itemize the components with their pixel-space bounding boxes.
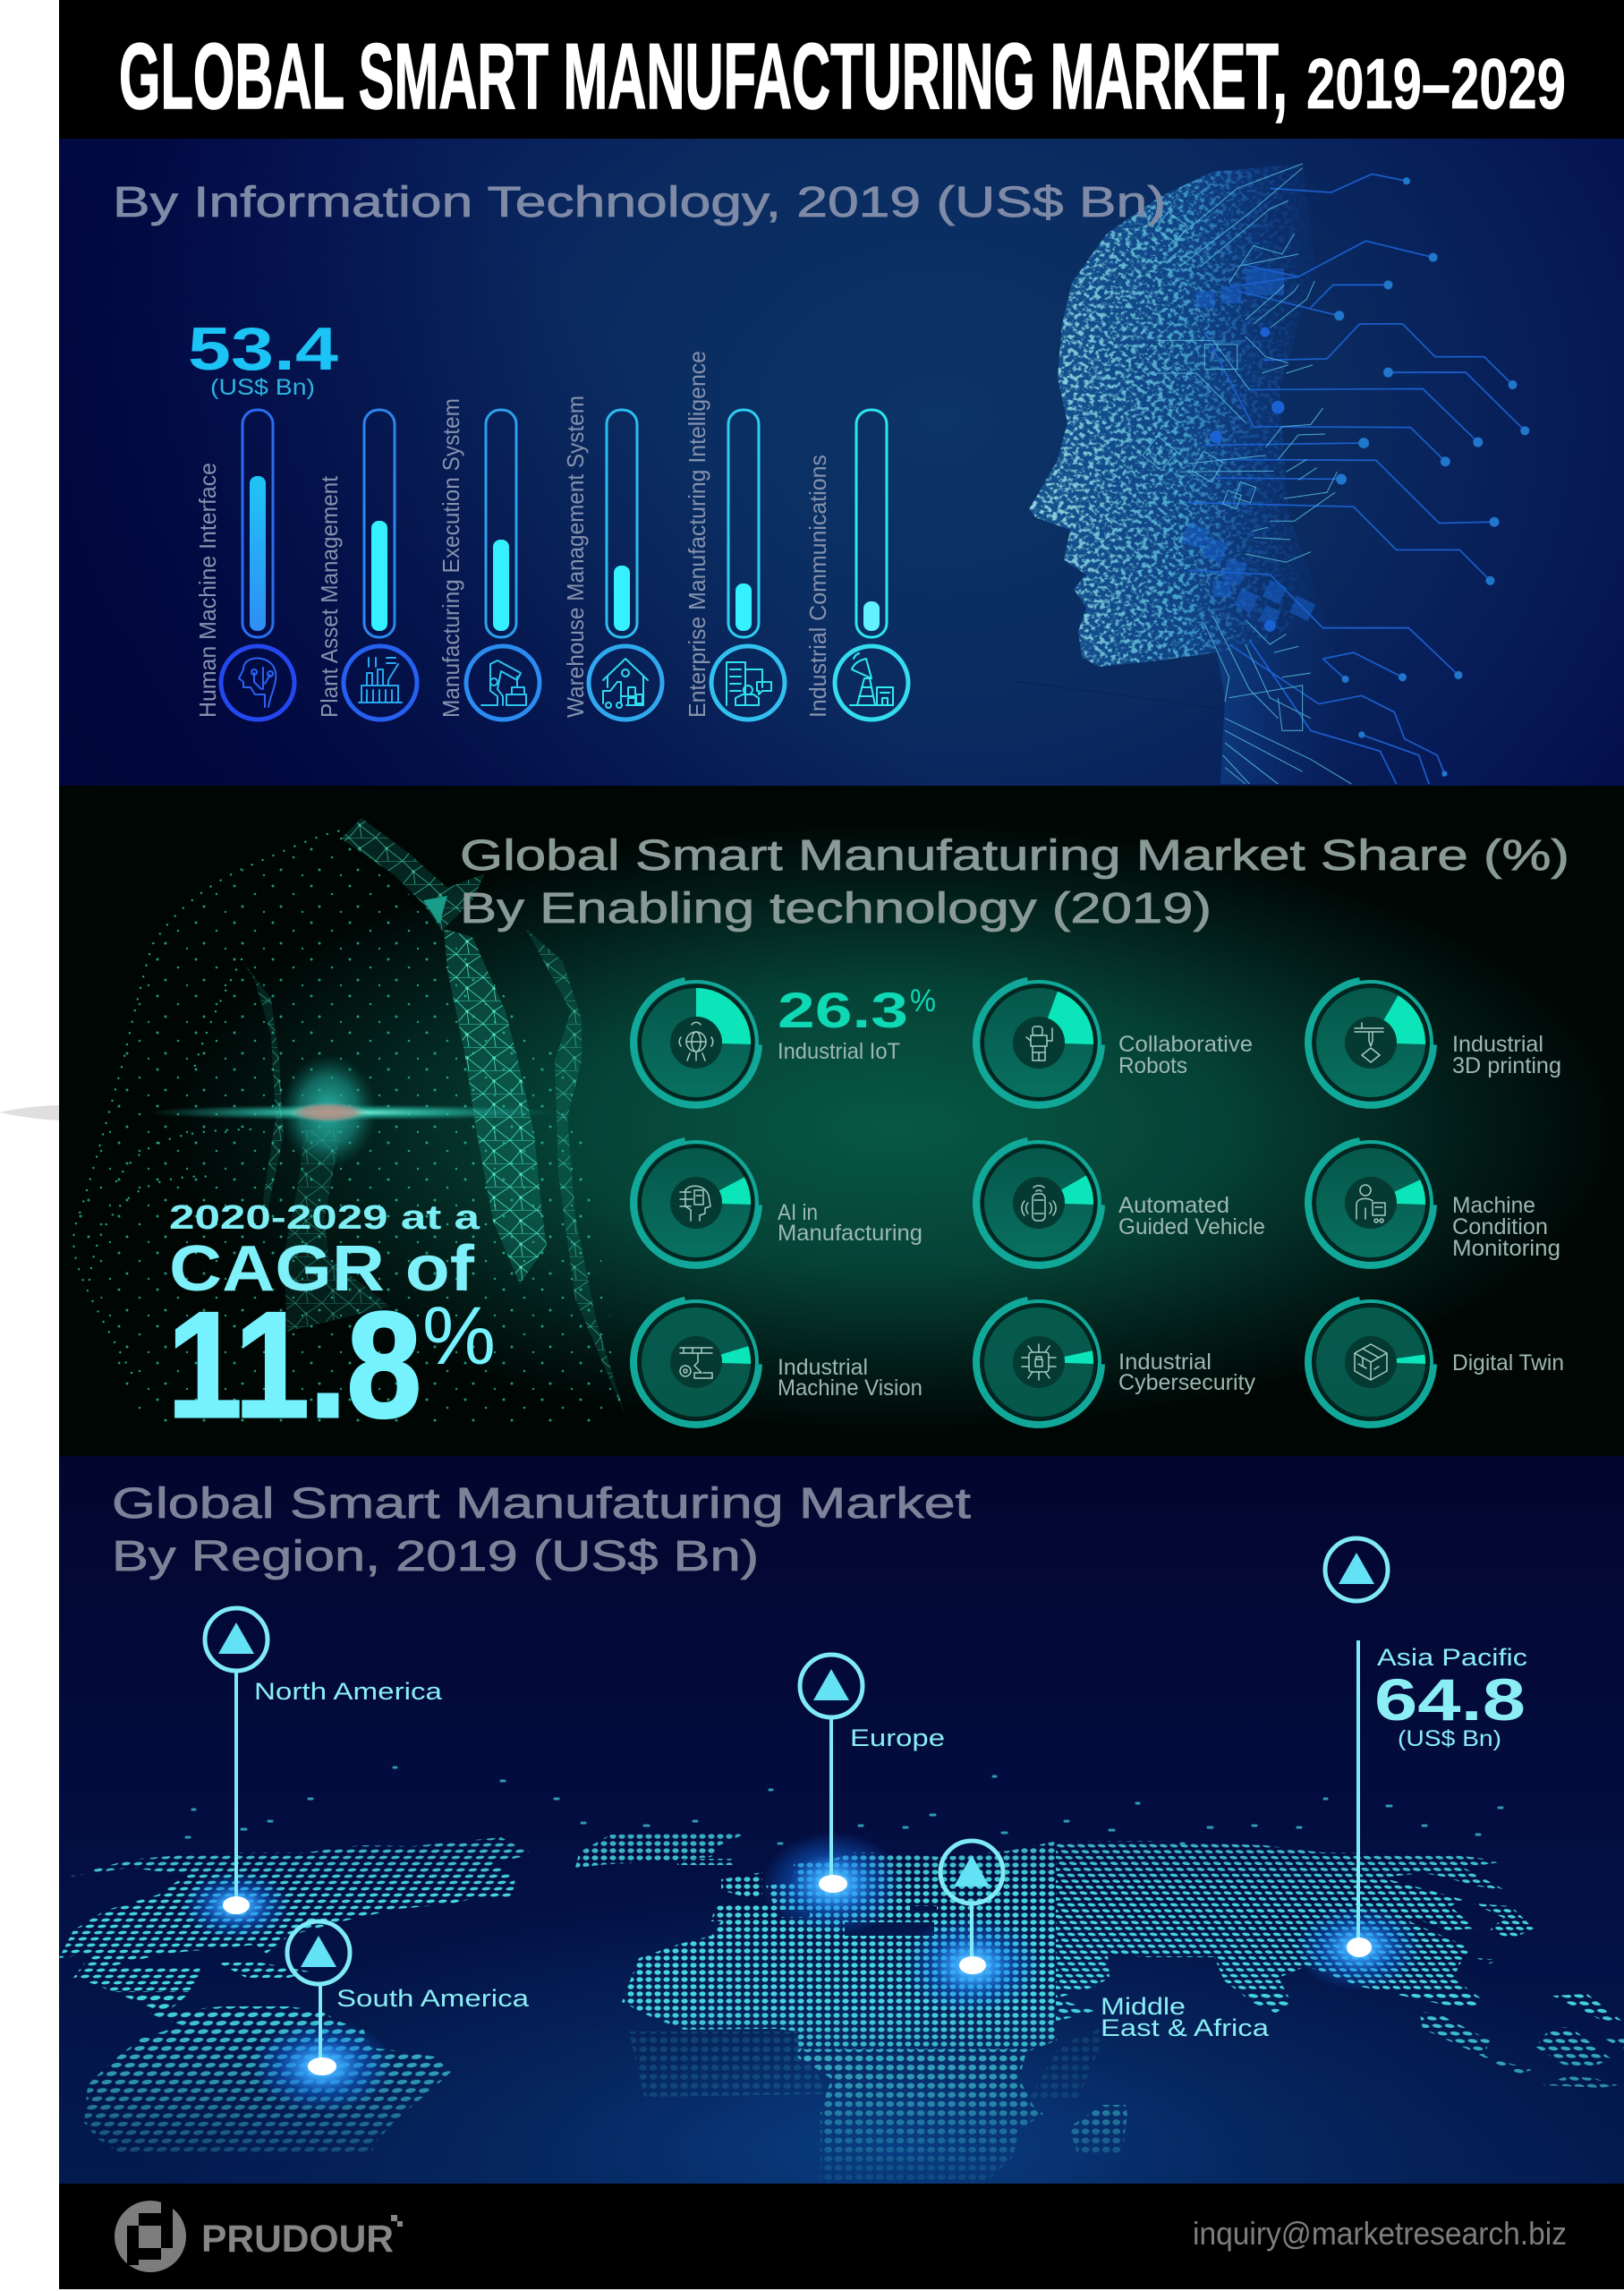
label: automated guided vehicle: Automated — [1118, 1193, 1229, 1218]
bar: enterprise manufacturing intelligence — [684, 351, 785, 720]
dotted world map — [59, 1767, 1624, 2184]
panel: market share by enabling technology — [0, 786, 1624, 1456]
value: 53.4: 53.4 — [188, 315, 338, 383]
label: industrial cybersecurity: Industrial — [1118, 1350, 1212, 1375]
value: 26.3 percent: % — [910, 984, 936, 1018]
label: north america: North America — [254, 1678, 443, 1705]
label: asia pacific: Asia Pacific — [1377, 1644, 1527, 1671]
label: automated guided vehicle: Guided Vehicle — [1118, 1214, 1265, 1239]
donut: collaborative robots — [976, 981, 1101, 1105]
value: 64.8: 64.8 — [1374, 1666, 1526, 1733]
logo mark — [115, 2197, 186, 2272]
bar: warehouse management system: Warehouse Management System — [562, 396, 589, 718]
pin: north america — [181, 1608, 443, 1939]
unit label: (US$ Bn) — [1398, 1726, 1501, 1751]
bar: human machine interface: Human Machine Interface — [194, 463, 221, 718]
donut: AI in manufacturing — [633, 1141, 759, 1265]
label: industrial machine vision: Machine Vision — [778, 1375, 923, 1401]
label: industrial machine vision — [778, 1355, 923, 1401]
label: industrial cybersecurity: Cybersecurity — [1118, 1370, 1255, 1395]
label: collaborative robots: Collaborative — [1118, 1032, 1253, 1057]
label: AI in manufacturing: Manufacturing — [778, 1221, 923, 1246]
donut: industrial cybersecurity — [976, 1300, 1101, 1425]
label: europe: Europe — [850, 1725, 945, 1751]
label: collaborative robots: Robots — [1118, 1053, 1187, 1078]
pin: asia pacific — [1295, 1538, 1527, 1990]
label: AI in manufacturing: AI in — [778, 1200, 818, 1225]
label: industrial 3D printing — [1452, 1032, 1561, 1078]
label: machine condition monitoring: Condition — [1452, 1214, 1548, 1239]
label: machine condition monitoring: Machine — [1452, 1193, 1535, 1218]
pin: middle east and africa: East & Africa — [1101, 2014, 1270, 2041]
donut: industrial 3D printing — [1308, 981, 1433, 1105]
bar: warehouse management system — [562, 396, 662, 720]
percent sign: % — [422, 1290, 496, 1382]
label: digital twin: Digital Twin — [1452, 1350, 1564, 1375]
bar: manufacturing execution system: Manufacturing Execution System — [438, 398, 464, 718]
label: industrial machine vision: Industrial — [778, 1355, 868, 1380]
label: south america: South America — [336, 1985, 530, 2012]
bar: industrial communications: Industrial Communications — [804, 455, 831, 718]
value: 26.3 percent — [778, 982, 936, 1038]
illustration: wireframe head — [0, 818, 626, 1423]
bar: human machine interface — [194, 410, 294, 720]
panel heading: Global Smart Manufaturing Market Share (%) — [460, 832, 1569, 880]
label: middle east and africa: Middle — [1101, 1993, 1186, 2020]
donut: automated guided vehicle — [976, 1141, 1101, 1265]
label: automated guided vehicle — [1118, 1193, 1265, 1239]
pin: south america — [251, 1921, 530, 2113]
panel heading: Global Smart Manufaturing Market — [112, 1480, 971, 1528]
label: collaborative robots — [1118, 1032, 1253, 1078]
value: 53.4 — [188, 315, 338, 400]
footer — [59, 2184, 1624, 2289]
bar: manufacturing execution system — [438, 398, 540, 720]
glow flare — [0, 1054, 557, 1169]
panel: by information technology — [59, 139, 1624, 786]
label: AI in manufacturing — [778, 1200, 923, 1246]
label: industrial 3D printing: 3D printing — [1452, 1053, 1561, 1078]
donut: digital twin — [1308, 1300, 1433, 1425]
label: industrial IoT: Industrial IoT — [778, 1039, 900, 1064]
bar: plant asset management — [316, 410, 417, 720]
contact email: inquiry@marketresearch.biz — [1193, 2215, 1567, 2252]
illustration: circuit head — [1016, 164, 1529, 784]
panel heading — [460, 832, 1569, 933]
donut: industrial machine vision — [633, 1300, 759, 1425]
bar: enterprise manufacturing intelligence: Enterprise Manufacturing Intelligence — [684, 351, 710, 718]
callout: CAGR: 2020-2029 at a — [169, 1199, 480, 1237]
value: 26.3 percent: 26.3 — [778, 982, 908, 1038]
panel heading — [112, 1480, 971, 1580]
label: machine condition monitoring — [1452, 1193, 1560, 1261]
value: 11.8: 11.8 — [167, 1281, 421, 1449]
unit label: (US$ Bn) — [210, 375, 315, 400]
panel heading line 2: By Region, 2019 (US$ Bn) — [112, 1533, 759, 1580]
label: machine condition monitoring: Monitoring — [1452, 1236, 1560, 1261]
label: industrial cybersecurity — [1118, 1350, 1255, 1395]
pin: middle east and africa — [903, 1841, 1270, 2041]
bar: industrial communications — [804, 410, 908, 720]
logo wordmark: PRUDOUR — [201, 2218, 394, 2261]
panel heading: By Information Technology, 2019 (US$ Bn) — [113, 179, 1166, 226]
label: industrial 3D printing: Industrial — [1452, 1032, 1543, 1057]
title banner — [59, 0, 1624, 139]
bar: plant asset management: Plant Asset Management — [316, 475, 343, 718]
donut: machine condition monitoring — [1308, 1141, 1433, 1265]
pin: europe — [761, 1655, 945, 1936]
CAGR of: CAGR of — [169, 1233, 475, 1305]
donut: industrial IoT — [633, 981, 759, 1105]
panel heading line 2: By Enabling technology (2019) — [460, 885, 1212, 933]
callout: CAGR — [167, 1199, 496, 1449]
panel: by region — [59, 1456, 1624, 2184]
